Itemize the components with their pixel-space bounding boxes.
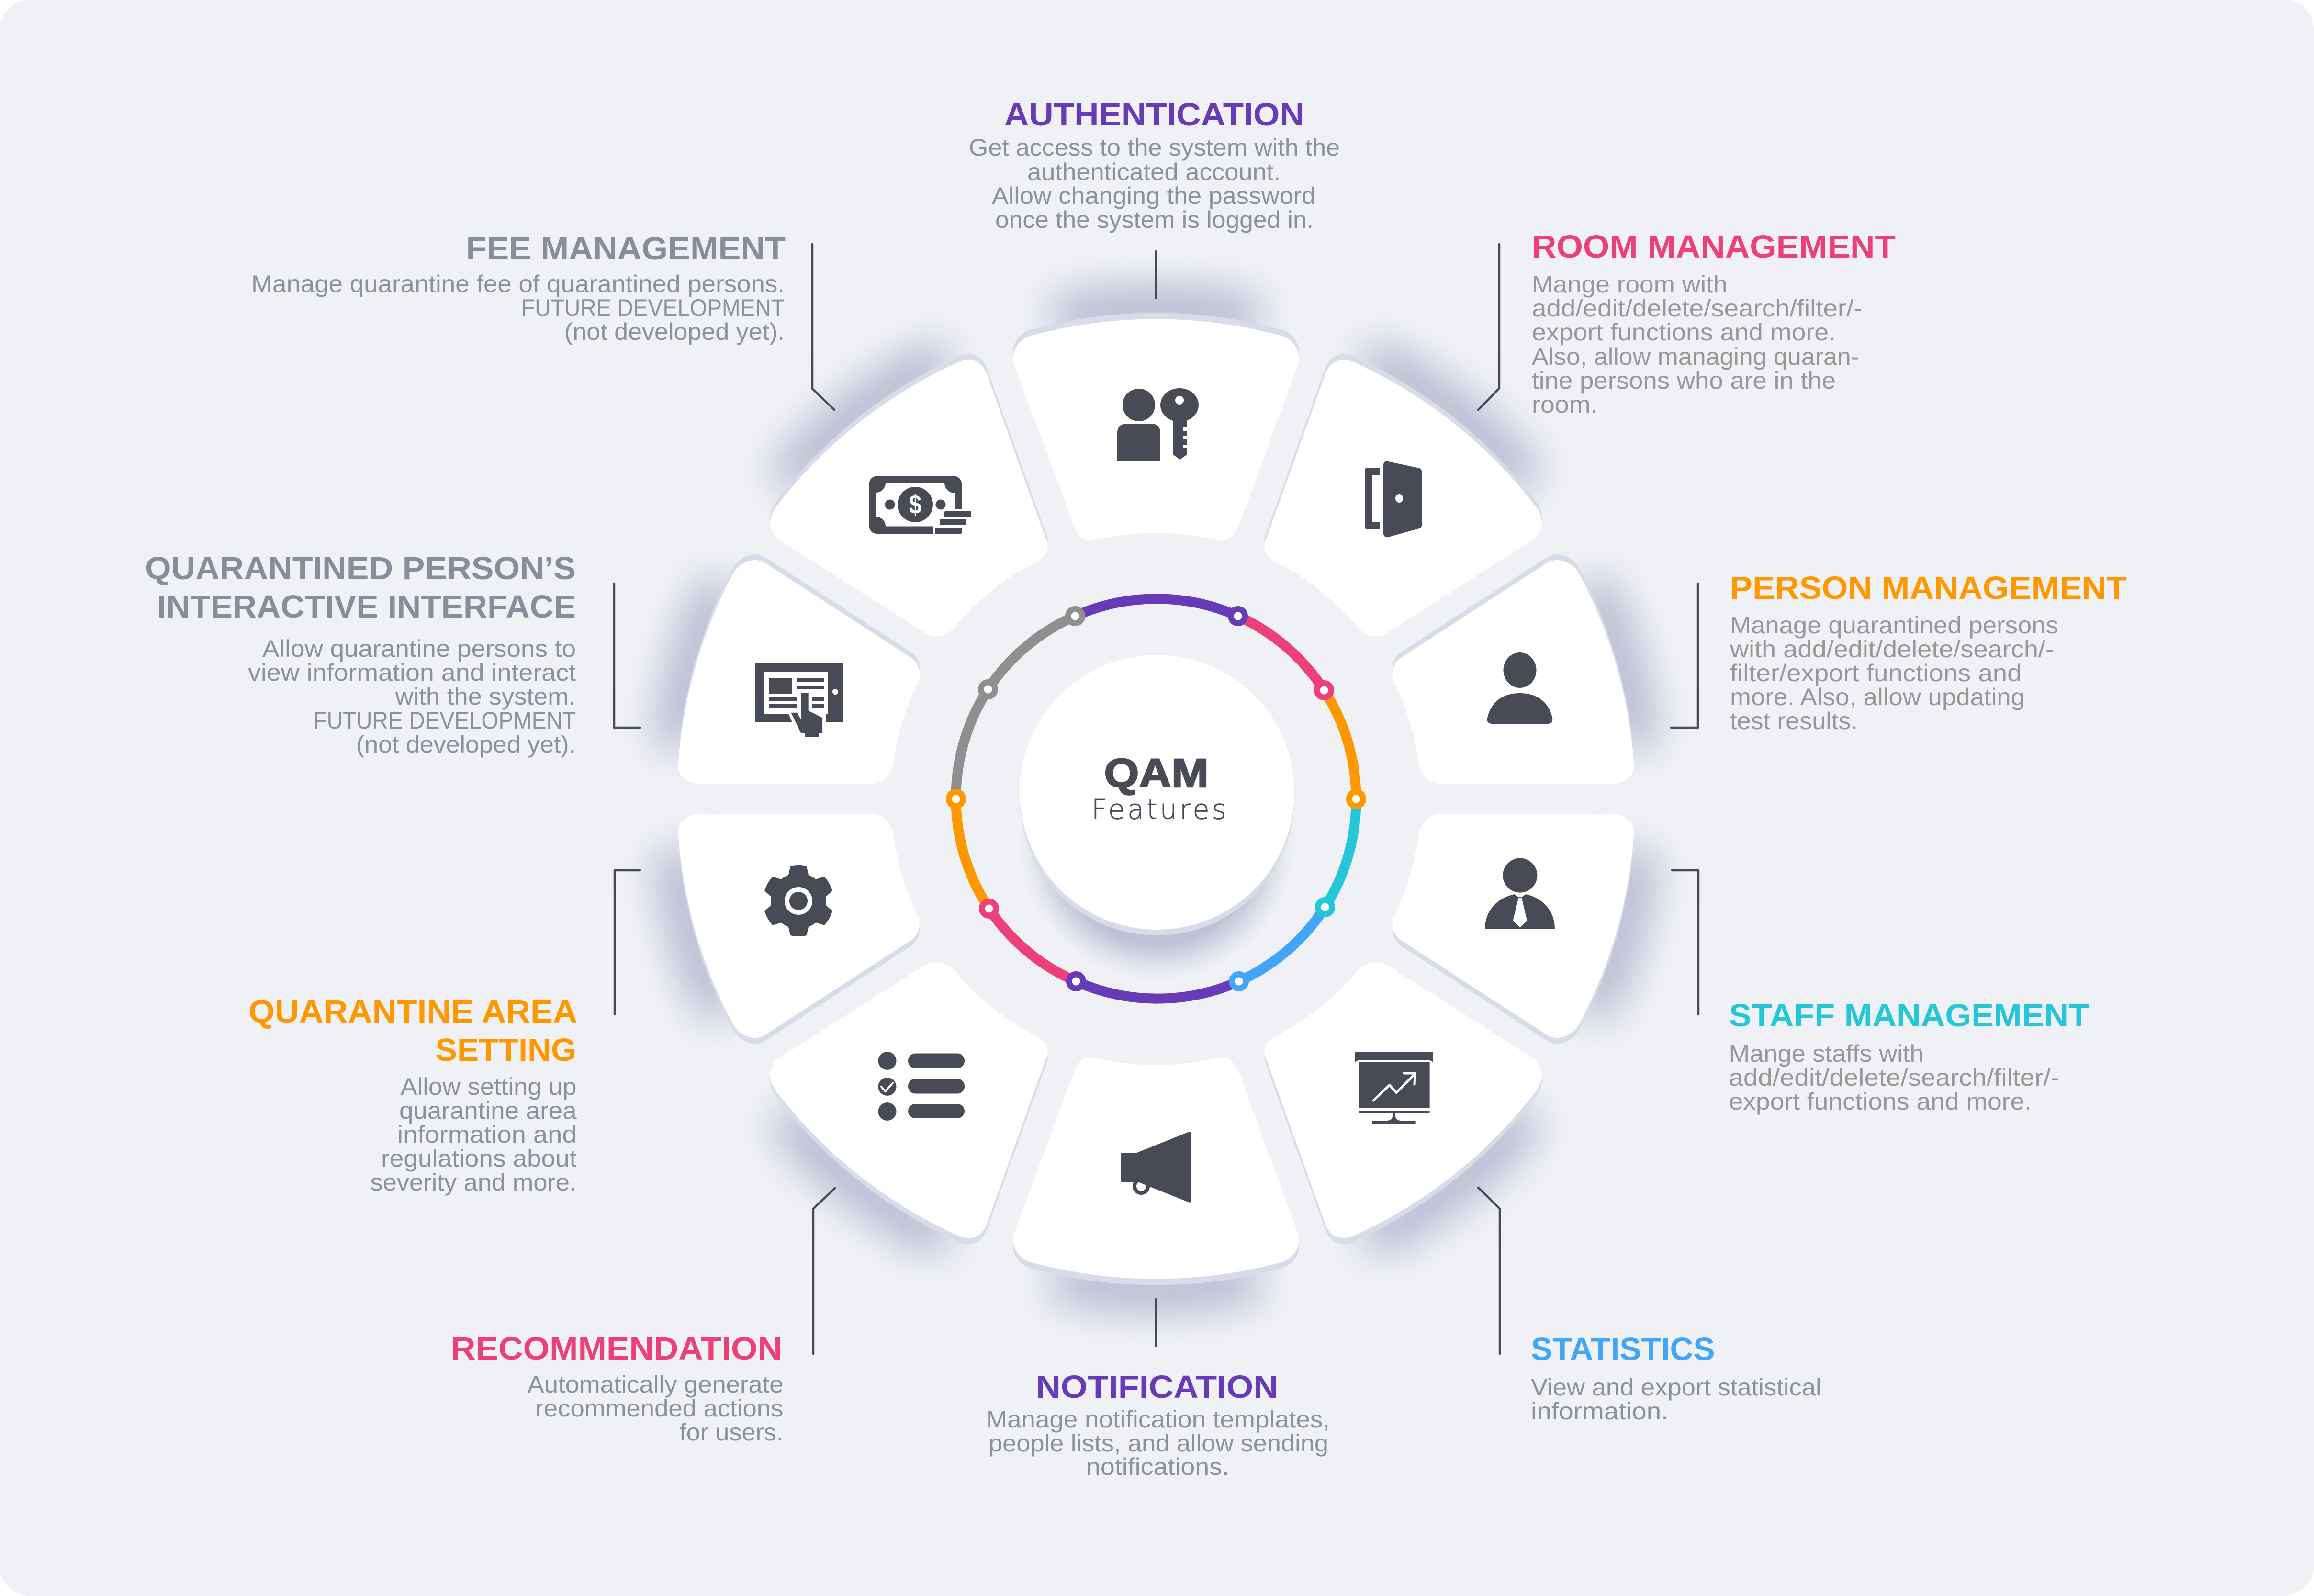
description: authenticated account.: [1027, 158, 1281, 185]
description: FUTURE DEVELOPMENT: [521, 294, 785, 321]
description: Allow changing the password: [992, 182, 1315, 209]
text: fee management: [251, 231, 786, 345]
description: [248, 635, 576, 758]
card: quarantine area setting: [678, 814, 920, 1044]
description: [986, 1406, 1330, 1480]
text: room management: [1532, 229, 1896, 418]
connector lines: [614, 244, 1698, 1354]
heading: RECOMMENDATION: [451, 1331, 782, 1367]
description: (not developed yet).: [564, 318, 785, 345]
icon: door: [1365, 461, 1422, 537]
text: quarantine area setting: [248, 994, 577, 1196]
hub edge: [1020, 661, 1294, 935]
text: statistics: [1531, 1331, 1821, 1425]
description: [1730, 612, 2058, 734]
card: fee management: [770, 354, 1048, 636]
card: staff management: [1393, 814, 1634, 1044]
connector: statistics: [1478, 1188, 1500, 1354]
description: add/edit/delete/search/filter/-: [1532, 295, 1863, 322]
connector: quarantine area setting: [615, 870, 640, 1014]
description: Allow setting up: [400, 1073, 576, 1100]
connector: recommendation: [813, 1188, 835, 1354]
description: (not developed yet).: [356, 731, 576, 758]
colored ring: [949, 599, 1363, 999]
description: Mange staffs with: [1729, 1040, 1923, 1067]
description: filter/export functions and: [1730, 660, 2022, 686]
description: people lists, and allow sending: [989, 1430, 1328, 1457]
feature wheel: [675, 308, 1637, 1290]
icon: person and key: [1117, 388, 1199, 461]
description: FUTURE DEVELOPMENT: [313, 707, 576, 734]
text: notification: [986, 1369, 1330, 1480]
description: export functions and more.: [1729, 1088, 2032, 1115]
description: Manage quarantine fee of quarantined persons.: [251, 270, 785, 297]
heading: NOTIFICATION: [1036, 1369, 1278, 1405]
description: Allow quarantine persons to: [262, 635, 576, 662]
icon: person: [1487, 652, 1552, 724]
description: [371, 1073, 577, 1196]
heading: [248, 994, 577, 1068]
heading: QUARANTINE AREA: [248, 994, 577, 1030]
description: severity and more.: [371, 1169, 576, 1196]
connector: person management: [1671, 584, 1698, 728]
card: recommendation: [770, 962, 1048, 1244]
card: statistics: [1264, 962, 1542, 1244]
heading: FEE MANAGEMENT: [466, 231, 786, 267]
description: test results.: [1730, 708, 1858, 734]
description: view information and interact: [248, 659, 576, 686]
ring segments: [956, 599, 1356, 999]
heading: [145, 551, 576, 625]
text: authentication: [969, 97, 1340, 233]
icon: checklist: [878, 1052, 965, 1121]
description: information and: [397, 1121, 577, 1148]
description: with the system.: [395, 683, 576, 710]
description: regulations about: [381, 1145, 577, 1172]
card: notification: [1013, 1057, 1299, 1285]
description: [251, 270, 785, 345]
description: [969, 134, 1340, 233]
connector: staff management: [1672, 870, 1698, 1014]
center hub: [1018, 655, 1296, 982]
text: staff management: [1729, 998, 2089, 1115]
description: Mange room with: [1532, 271, 1728, 298]
description: quarantine area: [399, 1097, 577, 1124]
description: room.: [1532, 391, 1598, 418]
icon: banknote and coins: $: [909, 489, 921, 519]
hub shadow: [1018, 705, 1296, 982]
description: Manage quarantined persons: [1730, 612, 2058, 639]
description: [1729, 1040, 2059, 1115]
description: once the system is logged in.: [995, 206, 1314, 233]
card: room management: [1264, 354, 1542, 636]
description: [1532, 271, 1863, 418]
description: recommended actions: [535, 1395, 783, 1422]
card: quarantined person's interface: [678, 554, 920, 784]
connector: notification: [1155, 1299, 1157, 1346]
heading: QUARANTINED PERSON’S: [145, 551, 576, 586]
icon: staff with tie: [1485, 858, 1555, 929]
heading: STAFF MANAGEMENT: [1729, 998, 2089, 1034]
heading: ROOM MANAGEMENT: [1532, 229, 1896, 265]
description: Manage notification templates,: [986, 1406, 1330, 1433]
description: for users.: [679, 1419, 783, 1446]
description: Get access to the system with the: [969, 134, 1340, 161]
icon: touch tablet: [755, 663, 843, 737]
hub title: QAM: [1104, 751, 1209, 796]
text: recommendation: [451, 1331, 783, 1446]
description: more. Also, allow updating: [1730, 684, 2025, 710]
description: View and export statistical: [1531, 1374, 1821, 1401]
description: [528, 1371, 783, 1446]
description: Automatically generate: [528, 1371, 783, 1398]
heading: AUTHENTICATION: [1004, 97, 1304, 133]
icon: presentation screen with chart: [1355, 1052, 1433, 1124]
icon: megaphone: [1121, 1132, 1191, 1203]
description: notifications.: [1086, 1453, 1229, 1480]
description: Also, allow managing quaran-: [1532, 343, 1859, 370]
ring nodes: [949, 609, 1363, 989]
description: with add/edit/delete/search/-: [1730, 636, 2054, 663]
card shadows: [675, 308, 1637, 1290]
heading: STATISTICS: [1531, 1331, 1715, 1367]
connector: room management: [1478, 244, 1499, 410]
card: authentication: [1013, 313, 1299, 541]
icon: banknote and coins: [869, 476, 971, 535]
description: information.: [1531, 1398, 1669, 1425]
description: [1531, 1374, 1821, 1425]
icon: gear: [763, 865, 834, 936]
heading: INTERACTIVE INTERFACE: [157, 589, 576, 625]
heading: PERSON MANAGEMENT: [1730, 570, 2127, 606]
description: tine persons who are in the: [1532, 367, 1836, 394]
heading: SETTING: [436, 1032, 576, 1068]
text: quarantined person's interface: [145, 551, 576, 758]
text: person management: [1730, 570, 2127, 734]
hub disc: [1020, 655, 1294, 930]
connector: authentication: [1155, 251, 1157, 298]
hub subtitle: Features: [1091, 794, 1226, 825]
description: export functions and more.: [1532, 319, 1836, 346]
connector: quarantined person's interface: [614, 584, 640, 728]
connector: fee management: [812, 244, 834, 410]
card: person management: [1393, 554, 1634, 784]
description: add/edit/delete/search/filter/-: [1729, 1064, 2059, 1091]
